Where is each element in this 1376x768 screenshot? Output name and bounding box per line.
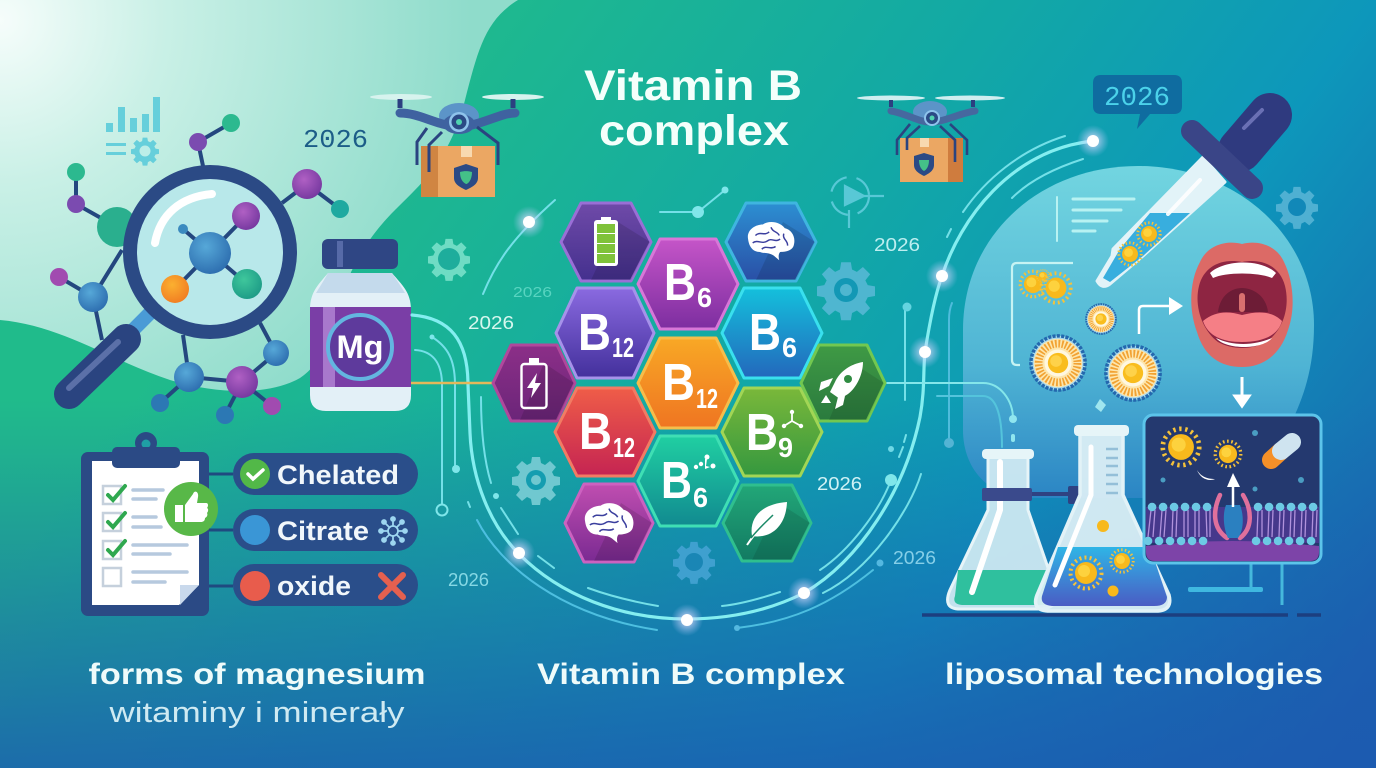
background bottom shade xyxy=(0,400,1376,768)
left panel: molecule under magnifier xyxy=(50,97,368,424)
icon: cross xyxy=(381,575,403,597)
pill: Chelated xyxy=(233,453,418,495)
circuit nodes xyxy=(430,125,1109,636)
hexagon labels: B xyxy=(661,452,692,510)
hex: B6 cyan xyxy=(722,288,822,378)
hexagon labels: B xyxy=(749,304,781,362)
membrane channel xyxy=(1215,473,1250,538)
caption: forms of magnesium: forms of magnesium xyxy=(88,658,425,691)
liposome small xyxy=(1086,304,1116,334)
year labels: 2026 xyxy=(468,313,514,333)
arrow to mouth xyxy=(1139,297,1183,334)
year labels: 2026 xyxy=(513,284,552,301)
right drone xyxy=(857,96,1005,182)
year labels xyxy=(448,235,936,590)
yellow particles xyxy=(1020,270,1071,303)
icon: dropper xyxy=(1097,110,1270,286)
hexagon labels: 6 xyxy=(782,332,797,363)
magnesium bottle xyxy=(310,239,411,411)
hex: battery xyxy=(561,203,651,281)
flask left xyxy=(948,449,1080,609)
hexagon labels: 6 xyxy=(693,482,708,513)
pill: oxide xyxy=(233,564,418,606)
hex: battery bolt xyxy=(493,345,575,421)
icon: open mouth xyxy=(1191,243,1293,367)
crescent xyxy=(1197,470,1215,480)
droplet xyxy=(1095,399,1106,412)
caption: liposomal technologies: liposomal technologies xyxy=(945,658,1323,691)
icon: bar chart and gear xyxy=(106,97,160,166)
title: Vitamin B xyxy=(584,62,802,110)
drone body xyxy=(857,96,1005,162)
magnifier lens xyxy=(130,172,290,332)
icon: thumbs up xyxy=(164,482,218,536)
icon: molecule xyxy=(379,517,407,545)
hexagon labels: B xyxy=(579,403,612,461)
hex: leaf xyxy=(723,485,811,561)
shelf xyxy=(922,613,1321,617)
lipid bilayer xyxy=(1148,507,1320,541)
text lines icon xyxy=(1057,197,1134,241)
hex: brain magenta xyxy=(565,484,653,562)
liposome right xyxy=(1106,346,1160,400)
clipboard checklist xyxy=(81,432,218,616)
speech bubble year: 2026 xyxy=(1104,84,1170,114)
speech bubble year xyxy=(1093,75,1182,129)
hexagon labels: 12 xyxy=(612,332,634,363)
hex: B12 violet xyxy=(556,288,654,378)
monitor: membrane transport xyxy=(1144,415,1321,605)
icon: target play xyxy=(831,177,884,228)
pill: Citrate: Citrate xyxy=(277,516,369,546)
gold connector xyxy=(411,382,492,384)
title: complex xyxy=(599,107,789,155)
hexagon labels: B xyxy=(664,254,696,312)
hexagon labels xyxy=(578,254,797,513)
delivery box xyxy=(900,138,963,182)
hexagon grid: vitamin B xyxy=(493,203,885,562)
hexagon labels: 12 xyxy=(613,432,635,463)
hexagon labels: B xyxy=(746,404,778,462)
year labels: 2026 xyxy=(893,548,936,568)
right panel: liposomal technologies xyxy=(963,166,1314,498)
hexagon labels: 6 xyxy=(697,282,712,313)
caption: vitamin B complex: Vitamin B complex xyxy=(537,658,845,691)
year labels: 2026 xyxy=(448,570,489,590)
pill: Citrate xyxy=(233,509,418,551)
year label: 2026 xyxy=(303,125,368,155)
year labels: 2026 xyxy=(817,474,862,494)
pill: oxide: oxide xyxy=(277,571,351,601)
circuit lines xyxy=(412,136,1093,630)
delivery box xyxy=(421,146,495,197)
hex: B12 red xyxy=(555,388,655,476)
caption: forms of magnesium xyxy=(88,658,425,729)
drone body xyxy=(370,94,544,172)
molecule atoms xyxy=(50,114,349,424)
liposome left xyxy=(1031,336,1085,390)
hex: B12 orange xyxy=(638,338,738,428)
bottle label: Mg xyxy=(336,329,384,365)
pill: Chelated: Chelated xyxy=(277,460,399,490)
capsule xyxy=(1271,442,1292,460)
molecule bonds xyxy=(59,123,340,415)
light top-left wave xyxy=(0,0,518,391)
hexagon labels: B xyxy=(662,354,695,412)
hex: B6 magenta xyxy=(638,239,738,329)
flask right xyxy=(1036,425,1170,611)
magnifier handle xyxy=(69,308,155,394)
icon: gears xyxy=(428,187,1318,584)
arrow down xyxy=(1235,377,1249,406)
connectors xyxy=(209,474,233,586)
left drone xyxy=(370,94,544,197)
hex: B9 green xyxy=(722,388,822,476)
sub caption: witaminy i minerały xyxy=(108,697,405,729)
hexagon labels: B xyxy=(578,304,611,362)
hex: brain blue xyxy=(726,203,816,281)
hex: B6 teal xyxy=(638,436,738,526)
hexagon labels: 12 xyxy=(696,383,718,414)
title xyxy=(584,62,802,155)
hexagon labels: 9 xyxy=(778,432,793,463)
year labels: 2026 xyxy=(874,235,920,255)
hex: rocket xyxy=(801,345,885,421)
bracket xyxy=(1012,263,1073,365)
